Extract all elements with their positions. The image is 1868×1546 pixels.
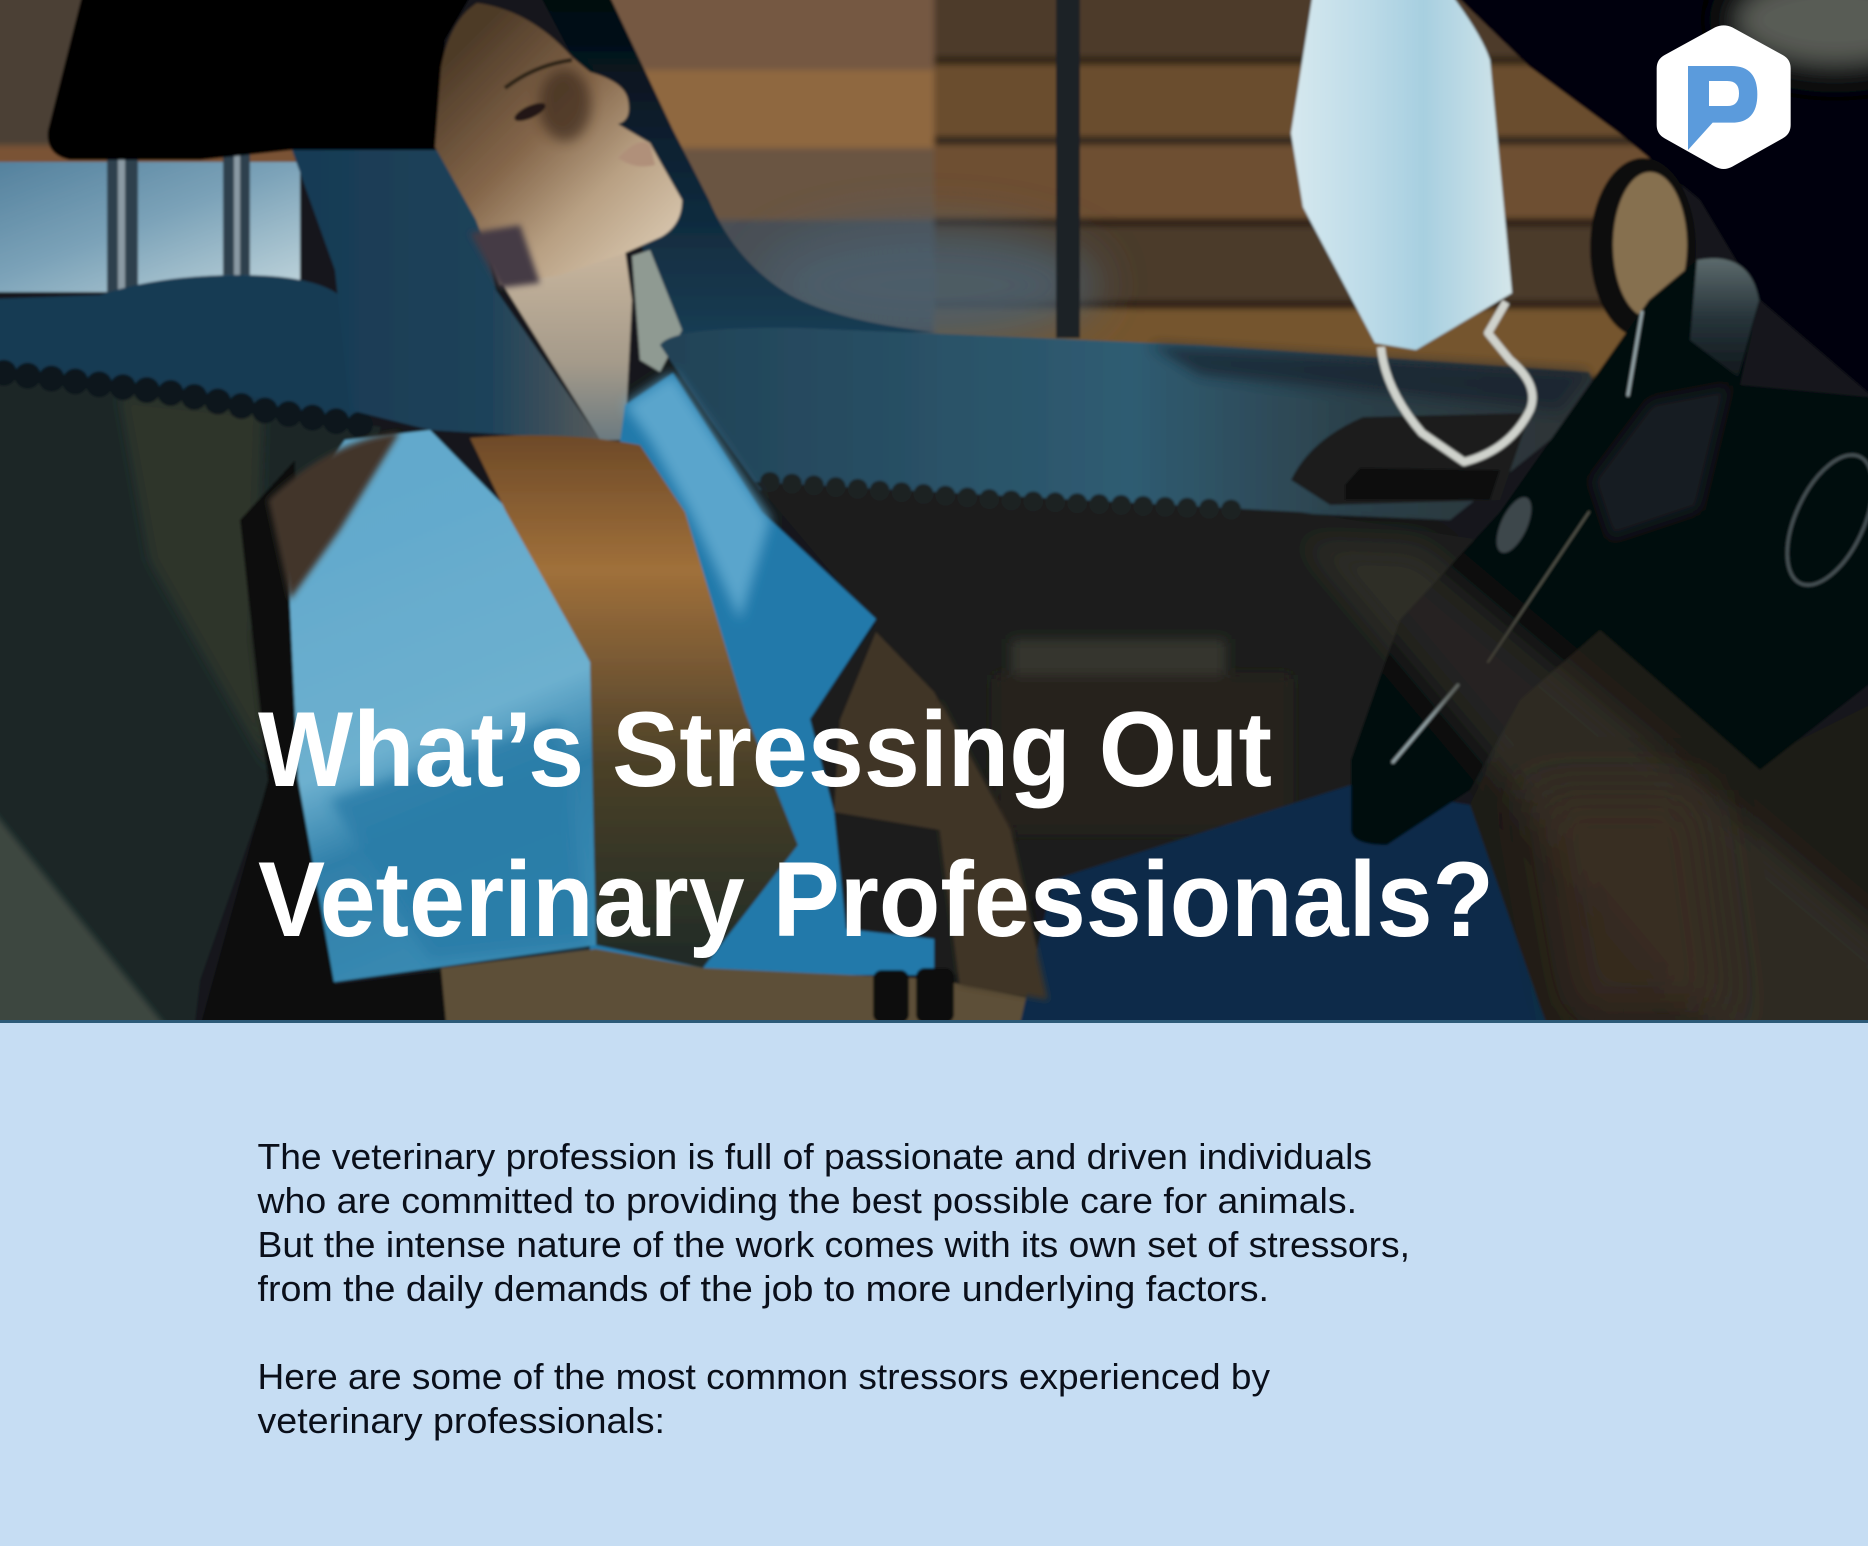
introduction text: from the daily demands of the job to more underlying factors.: [258, 1268, 1269, 1309]
diagonal reflection band: [1300, 540, 1868, 1063]
hair left of shoulder: [268, 432, 400, 600]
hand in shadow: [940, 700, 1048, 1000]
seat edge scallops: [0, 370, 381, 428]
long brown hair: [470, 435, 798, 968]
dark post outside: [1056, 0, 1080, 338]
surgical mask: [1291, 0, 1512, 350]
scrub collar light area: [625, 373, 770, 620]
brow: [505, 60, 572, 88]
light glow on roof: [1730, 0, 1868, 70]
head rest posts: [107, 150, 250, 295]
introduction text: Here are some of the most common stressors experienced by: [258, 1356, 1270, 1397]
forearm: [441, 949, 1040, 1063]
pale door sill strip: [632, 250, 682, 372]
wing mirror: [1590, 158, 1696, 338]
warm blur lower right: [1530, 790, 1730, 1020]
eye socket shadow: [539, 69, 591, 141]
seat olive panel: [120, 395, 270, 770]
eye: [512, 99, 548, 125]
gauge ring: [1770, 442, 1868, 598]
face: [435, 3, 682, 285]
steering hub sheen: [1590, 385, 1730, 540]
lower dashboard and footwell: [755, 482, 1480, 980]
mask strap: [1381, 302, 1532, 462]
title: Veterinary Professionals?: [258, 839, 1494, 959]
windscreen pillar: [532, 0, 934, 340]
photo contents with slight softening: [0, 0, 1868, 1063]
hub badge: [1490, 492, 1538, 558]
introduction text: But the intense nature of the work comes with its own set of stressors,: [258, 1224, 1410, 1265]
title: [258, 689, 1494, 959]
jaw shadow: [470, 225, 540, 288]
dash edge scallops: [770, 482, 1240, 510]
rear seat dome: [0, 275, 370, 440]
rear side window: [0, 162, 300, 292]
mirror glass: [1613, 172, 1687, 318]
dark band under the windscreen: [1150, 345, 1589, 410]
outdoor background at upper left: [0, 0, 300, 167]
front seat back: [0, 370, 381, 1063]
darker fold on sleeve: [330, 720, 590, 960]
vent slot: [1345, 468, 1500, 500]
title: What’s Stressing Out: [258, 689, 1272, 809]
silver trim details: [1393, 312, 1642, 762]
introduction text: The veterinary profession is full of passionate and driven individuals: [258, 1136, 1372, 1177]
dashboard top: [660, 328, 1600, 520]
vent on dashboard: [1291, 413, 1530, 505]
glove box: [994, 639, 1291, 832]
wrist bands: [873, 968, 954, 1023]
introduction text: [256, 1136, 1410, 1441]
trousers: [1011, 785, 1560, 1063]
steering spoke highlight: [1690, 258, 1759, 377]
seat lower highlight: [0, 770, 195, 1063]
scrubs right of hair: [590, 373, 934, 975]
blue glass reflection over the wall: [760, 225, 1100, 345]
hero photo: nurse resting in car: [0, 0, 1868, 1023]
loose hair in blue reflection: [292, 150, 600, 440]
roof and right pillar: [1440, 0, 1868, 420]
gap shadow beside sleeve: [190, 460, 450, 1063]
wooden wall outside the windscreen: [600, 0, 1664, 378]
upper arm: [834, 632, 1048, 1000]
dark base of the car interior: [0, 0, 1868, 1063]
head rest and dark hair top: [48, 0, 480, 160]
white hexagon: [1657, 25, 1791, 169]
logo: hexagon P badge: [1656, 25, 1791, 169]
sleeve: [286, 430, 596, 982]
bottom edge line: [0, 1020, 1868, 1023]
blue P letter: [1688, 66, 1757, 150]
steering wheel and black console: [1351, 258, 1868, 845]
lips: [618, 142, 655, 166]
introduction text: veterinary professionals:: [258, 1400, 665, 1441]
neck: [500, 250, 632, 440]
lower right warm shadow: [1470, 630, 1868, 1063]
introduction text: who are committed to providing the best possible care for animals.: [256, 1180, 1357, 1221]
